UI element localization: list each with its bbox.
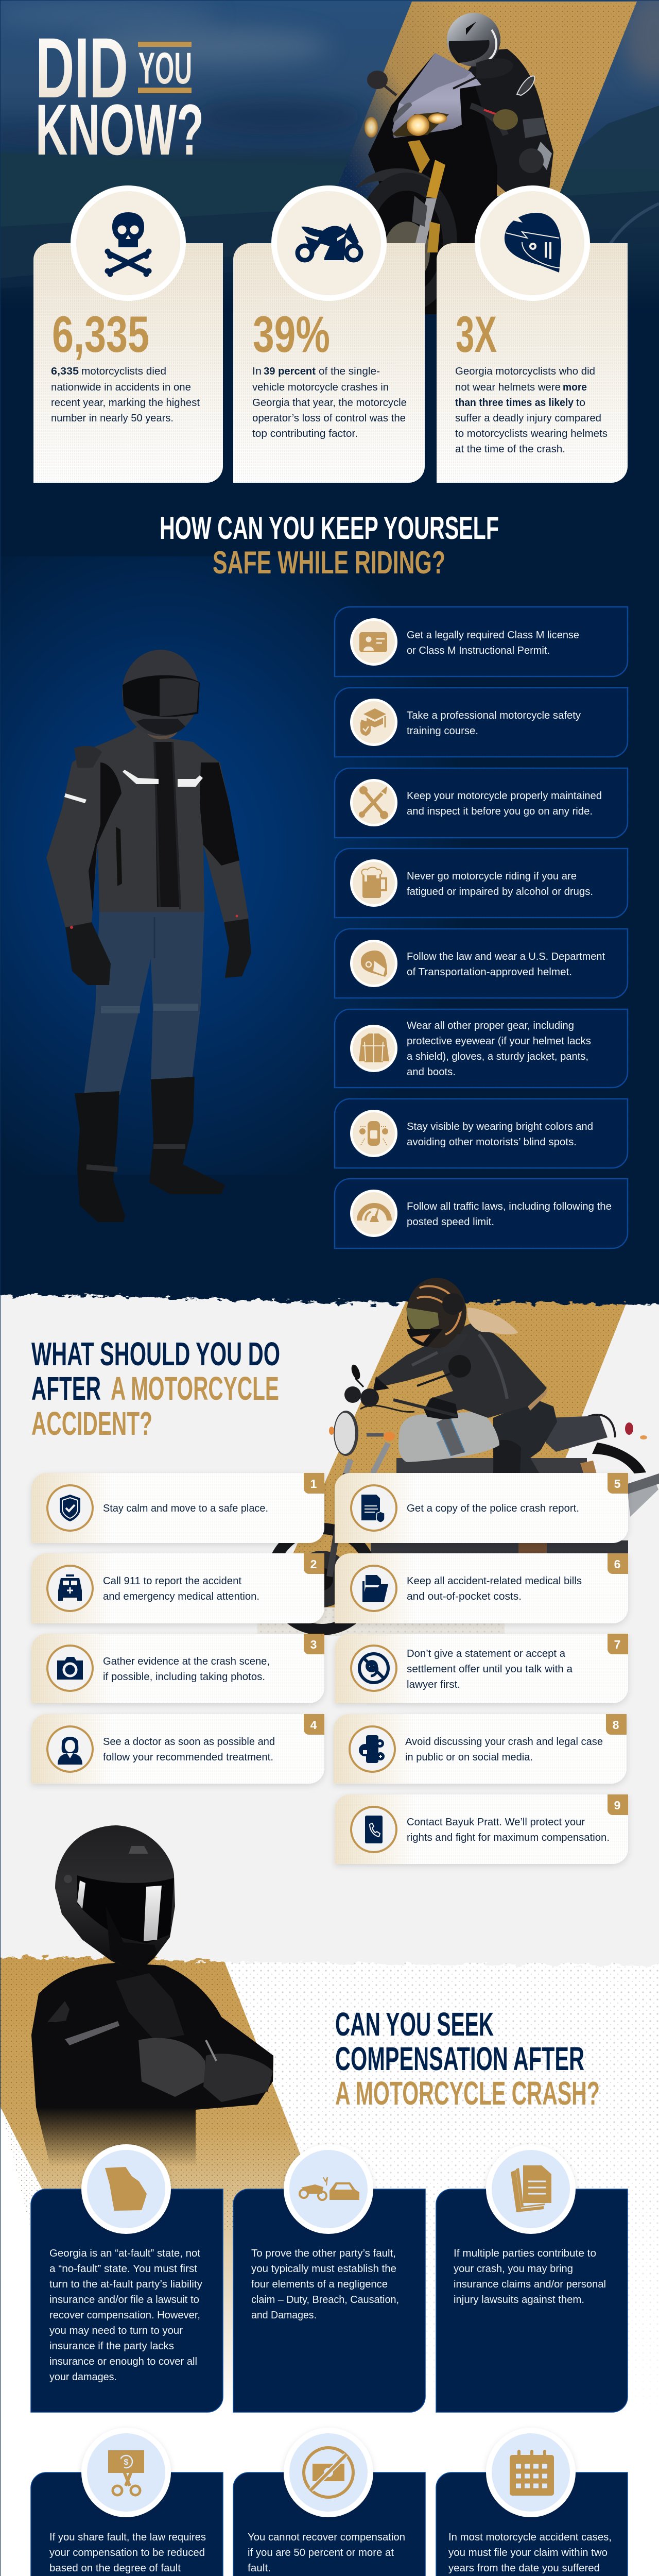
step number	[304, 1473, 324, 1494]
step 5 card	[335, 1473, 628, 1543]
tip text	[407, 871, 593, 897]
step 2 card	[31, 1553, 324, 1623]
step text: Contact Bayuk Pratt. We’ll protect your	[407, 1817, 585, 1828]
step text: Keep all accident-related medical bills	[407, 1575, 582, 1587]
step text: Don’t give a statement or accept a	[407, 1648, 566, 1659]
icon: beer mug	[350, 859, 397, 907]
info card: prove fault	[233, 2144, 425, 2412]
icon: social media phone	[350, 1726, 395, 1772]
card text: your damages.	[49, 2371, 117, 2383]
stat description: number in nearly 50 years.	[51, 413, 174, 424]
card text: fault.	[248, 2563, 271, 2574]
section heading	[31, 1335, 280, 1442]
stat description: 6,335	[51, 366, 79, 377]
tip text: and boots.	[407, 1066, 456, 1078]
icon: no statement	[351, 1646, 396, 1691]
step number	[304, 1634, 324, 1654]
title: did you know: KNOW?	[36, 89, 204, 170]
card text: insurance and/or file a lawsuit to	[49, 2294, 199, 2306]
icon: skull and crossbones	[71, 185, 186, 301]
card text: insurance or enough to cover all	[49, 2356, 197, 2367]
tip text	[407, 790, 602, 817]
card text: insurance claims and/or personal	[454, 2279, 606, 2290]
photo: rider with crossed arms	[31, 1825, 273, 2166]
icon: graduation cap and shield	[350, 699, 397, 746]
tip text: Follow all traffic laws, including following the	[407, 1201, 612, 1212]
card text: If multiple parties contribute to	[454, 2248, 596, 2259]
step number: 7	[614, 1638, 620, 1651]
stat card 1: 6,335	[33, 185, 223, 483]
card text	[49, 2532, 206, 2576]
step text	[405, 1736, 603, 1763]
icon: Georgia map	[81, 2144, 171, 2234]
stat card 2: 39%	[233, 185, 425, 483]
title: did you know: DID	[36, 21, 128, 116]
torn navy edge	[0, 1267, 659, 1305]
card text: recover compensation. However,	[49, 2310, 200, 2321]
info card: multiple parties	[436, 2144, 628, 2412]
icon: ambulance	[47, 1566, 93, 1611]
step number	[304, 1553, 324, 1574]
step text	[407, 1575, 582, 1602]
icon: id card	[350, 618, 397, 666]
card text: and Damages.	[251, 2310, 317, 2321]
stat number: 3X	[456, 306, 497, 363]
tip text: Keep your motorcycle properly maintained	[407, 790, 602, 802]
step number: 8	[613, 1718, 619, 1732]
step text: Call 911 to report the accident	[103, 1575, 241, 1587]
tip text: or Class M Instructional Permit.	[407, 645, 550, 656]
card text: claim – Duty, Breach, Causation,	[251, 2294, 399, 2306]
tip text: Take a professional motorcycle safety	[407, 710, 581, 721]
gold slanted panel behind rider	[257, 1288, 632, 1636]
light section background	[1, 1285, 659, 1976]
icon: sport motorcycle	[271, 185, 387, 301]
section heading: ACCIDENT?	[31, 1405, 152, 1442]
stat description: top contributing factor.	[252, 428, 358, 439]
tip text: a shield), gloves, a sturdy jacket, pants,	[407, 1051, 588, 1062]
step text: settlement offer until you talk with a	[407, 1664, 573, 1675]
card text: To prove the other party’s fault,	[251, 2248, 396, 2259]
stat description: motorcyclists died	[81, 366, 166, 377]
stat description: nationwide in accidents in one	[51, 382, 191, 393]
stat description	[252, 366, 407, 439]
icon: wrench and screwdriver	[350, 779, 397, 826]
step number	[608, 1794, 628, 1815]
panel: tip 5 helmet	[335, 929, 628, 998]
card text: In most motorcycle accident cases,	[448, 2532, 612, 2543]
stat description: In	[252, 366, 262, 377]
step number	[606, 1714, 627, 1735]
step text: Gather evidence at the crash scene,	[103, 1656, 270, 1667]
section heading: CAN YOU SEEK	[335, 2006, 494, 2043]
icon: stacked documents	[486, 2144, 576, 2234]
tip text: Stay visible by wearing bright colors and	[407, 1121, 593, 1132]
tip text: of Transportation-approved helmet.	[407, 967, 572, 978]
step number	[608, 1473, 628, 1494]
step text: and emergency medical attention.	[103, 1591, 259, 1602]
card text	[49, 2248, 202, 2383]
step text	[407, 1817, 610, 1843]
stat description: to motorcyclists wearing helmets	[455, 428, 608, 439]
icon: car blind spots	[350, 1110, 397, 1157]
icon: folder	[351, 1566, 396, 1611]
step 7 card	[335, 1634, 628, 1703]
step number: 9	[614, 1799, 620, 1812]
tip text: Never go motorcycle riding if you are	[407, 871, 577, 882]
step number: 2	[310, 1557, 317, 1571]
photo: rider in jacket, jeans and boots	[46, 650, 251, 1222]
step 8 card	[334, 1714, 627, 1784]
step 6 card	[335, 1553, 628, 1623]
stat description: not wear helmets were	[455, 382, 561, 393]
card text: your compensation to be reduced	[49, 2547, 205, 2558]
panel: tip 1 license	[335, 607, 628, 676]
step number: 6	[614, 1557, 620, 1571]
step 9 card	[335, 1794, 628, 1864]
photo: motorcycle and rider	[355, 13, 553, 314]
info card: at-fault state	[31, 2144, 223, 2412]
step number: 4	[310, 1718, 317, 1732]
tip text: Follow the law and wear a U.S. Department	[407, 951, 605, 962]
card text: If you share fault, the law requires	[49, 2532, 206, 2543]
step 4 card	[31, 1714, 324, 1784]
panel: tip 2 training	[335, 688, 628, 757]
step text: follow your recommended treatment.	[103, 1752, 273, 1763]
gold slanted panel behind rider	[334, 2, 637, 196]
card text	[454, 2248, 606, 2306]
step text: Avoid discussing your crash and legal case	[405, 1736, 603, 1748]
icon: calendar	[486, 2428, 576, 2517]
step 1 card	[31, 1473, 324, 1543]
section heading: SAFE WHILE RIDING?	[213, 545, 445, 581]
step number	[608, 1634, 628, 1654]
stat card 3: 3X	[437, 185, 628, 483]
hero photo background: sky and hills	[0, 0, 659, 309]
step text	[103, 1736, 275, 1763]
gold slanted panel behind rider	[1, 1947, 402, 2411]
tip text	[407, 710, 581, 737]
card text	[248, 2532, 405, 2574]
card text: years from the date you suffered	[448, 2563, 600, 2574]
card text: turn to the at-fault party’s liability	[49, 2279, 202, 2290]
icon: police report	[351, 1485, 396, 1531]
section heading	[160, 511, 499, 581]
card text: you typically must establish the	[251, 2263, 396, 2275]
panel: tip 7 visibility	[335, 1099, 628, 1168]
card text: Georgia is an “at-fault” state, not	[49, 2248, 200, 2259]
hero section: did you know	[0, 0, 659, 483]
stat description: Georgia motorcyclists who did	[455, 366, 595, 377]
icon: helmet	[475, 185, 590, 301]
section heading: WHAT SHOULD YOU DO	[31, 1335, 280, 1372]
stat description: suffer a deadly injury compared	[455, 413, 601, 424]
torn light grey edge	[0, 1906, 659, 1965]
card text: a “no-fault” state. You must first	[49, 2263, 197, 2275]
title: did you know: YOU	[138, 44, 192, 93]
step number: 1	[310, 1477, 317, 1490]
step text: Get a copy of the police crash report.	[407, 1503, 579, 1514]
tip text	[407, 1121, 593, 1148]
stat description: Georgia that year, the motorcycle	[252, 397, 407, 409]
section heading: A MOTORCYCLE	[111, 1370, 279, 1407]
card text	[448, 2532, 612, 2576]
card text: you must file your claim within two	[448, 2547, 608, 2558]
card text: based on the degree of fault	[49, 2563, 181, 2574]
icon: no money	[284, 2428, 373, 2517]
info card: shared fault	[31, 2428, 223, 2576]
panel: tip 8 traffic laws	[335, 1179, 628, 1248]
photo: woman riding motorcycle	[271, 1278, 659, 1630]
stat description: recent year, marking the highest	[51, 397, 200, 409]
title: did you know	[36, 21, 204, 170]
icon: phone call	[351, 1807, 396, 1852]
card text	[251, 2248, 399, 2321]
stat description	[51, 366, 200, 424]
panel: tip 3 maintenance	[335, 768, 628, 838]
tip text	[407, 630, 579, 656]
step text: and out-of-pocket costs.	[407, 1591, 522, 1602]
stat number: 39%	[253, 306, 330, 363]
card text: your crash, you may bring	[454, 2263, 573, 2275]
card text: injury lawsuits against them.	[454, 2294, 584, 2306]
blue radial glow background	[0, 556, 659, 1175]
step text: in public or on social media.	[405, 1752, 533, 1763]
step text	[103, 1575, 259, 1602]
tip text: training course.	[407, 725, 478, 737]
tip text: posted speed limit.	[407, 1216, 494, 1228]
compensation section	[0, 1825, 659, 2576]
stat description	[455, 366, 608, 455]
after an accident section	[0, 1267, 659, 1976]
tip text: and inspect it before you go on any ride.	[407, 806, 593, 817]
step number: 5	[614, 1477, 621, 1490]
panel: tip 4 impairment	[335, 849, 628, 918]
stat number: 6,335	[52, 306, 149, 363]
step text	[103, 1656, 270, 1683]
icon: motorcycle and car crash	[284, 2144, 373, 2234]
card text: you may need to turn to your	[49, 2325, 183, 2336]
section heading	[335, 2006, 600, 2112]
icon: shield check	[47, 1485, 93, 1531]
stat description: to	[576, 397, 585, 409]
icon: scissors cutting money: $	[124, 2458, 129, 2467]
stat description: of the single-	[319, 366, 380, 377]
info card: no recovery at 50 percent	[233, 2428, 425, 2576]
icon: doctor	[47, 1726, 93, 1772]
stat description: at the time of the crash.	[455, 444, 565, 455]
panel: tip 6 protective gear	[335, 1009, 628, 1088]
step text: rights and fight for maximum compensation.	[407, 1832, 610, 1843]
tip text	[407, 951, 605, 978]
step text: Stay calm and move to a safe place.	[103, 1503, 268, 1514]
card text: insurance if the party lacks	[49, 2341, 174, 2352]
icon: speedometer	[350, 1190, 397, 1237]
section heading: AFTER	[31, 1370, 101, 1407]
section heading: HOW CAN YOU KEEP YOURSELF	[160, 511, 499, 546]
step text	[407, 1648, 573, 1690]
card text: You cannot recover compensation	[248, 2532, 405, 2543]
step number: 3	[310, 1638, 317, 1651]
stat description: more	[563, 382, 587, 393]
tip text: Wear all other proper gear, including	[407, 1020, 574, 1031]
card text: four elements of a negligence	[251, 2279, 388, 2290]
stat description: than three times as likely	[455, 397, 574, 409]
step number	[304, 1714, 324, 1735]
icon: camera	[47, 1646, 93, 1691]
step number	[608, 1553, 628, 1574]
stat description: vehicle motorcycle crashes in	[252, 382, 389, 393]
tip text: protective eyewear (if your helmet lacks	[407, 1036, 591, 1047]
step text: if possible, including taking photos.	[103, 1671, 265, 1683]
white section background with halftone dots	[1, 1955, 659, 2576]
icon: jacket	[350, 1025, 397, 1072]
icon: scissors cutting money	[81, 2428, 171, 2517]
tip text	[407, 1020, 591, 1078]
stat description: operator’s loss of control was the	[252, 413, 406, 424]
card text: if you are 50 percent or more at	[248, 2547, 394, 2558]
step text: lawyer first.	[407, 1679, 460, 1690]
tip text: avoiding other motorists’ blind spots.	[407, 1137, 577, 1148]
tip text	[407, 1201, 612, 1228]
step text: See a doctor as soon as possible and	[103, 1736, 275, 1748]
icon: helmet	[350, 940, 397, 987]
safety section: how to keep safe	[0, 511, 659, 1248]
info card: filing deadline	[436, 2428, 628, 2576]
tip text: fatigued or impaired by alcohol or drugs.	[407, 886, 593, 897]
tip text: Get a legally required Class M license	[407, 630, 579, 641]
stat description: 39 percent	[264, 366, 316, 377]
step 3 card	[31, 1634, 324, 1703]
